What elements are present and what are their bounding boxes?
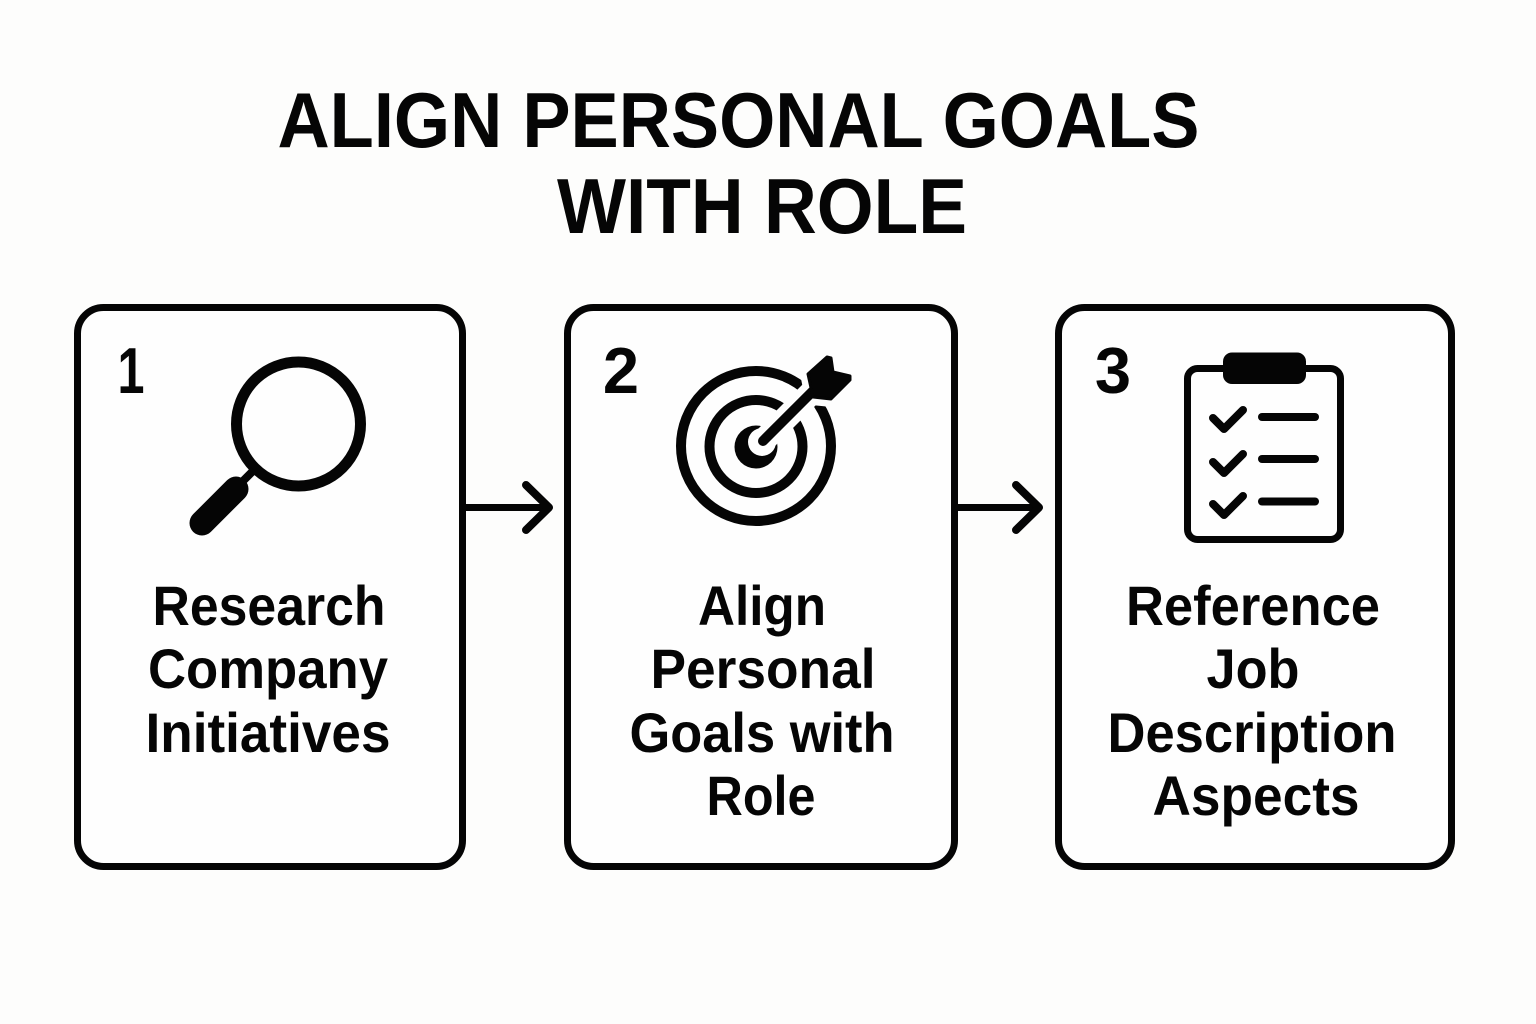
icon: magnifying glass — [202, 362, 360, 523]
arrow: step 2 to 3 — [958, 485, 1039, 530]
step 1 label — [146, 574, 390, 764]
step 2 label: Role — [706, 764, 816, 827]
step 1 label: Initiatives — [146, 701, 390, 764]
step 1 label: Research — [152, 574, 386, 637]
step 3 label: Aspects — [1152, 764, 1360, 827]
step 1 label: Company — [148, 637, 388, 700]
step 2 label: Personal — [650, 637, 876, 700]
step 2 label — [630, 574, 894, 827]
step 3 label — [1108, 574, 1396, 827]
arrow: step 1 to 2 — [466, 485, 549, 530]
icon: target with arrow — [681, 355, 852, 521]
icon: clipboard checklist — [1188, 352, 1340, 540]
panel: step 3 — [1058, 308, 1452, 866]
step 2 label: Goals with — [630, 701, 894, 764]
number 2: 2 — [603, 334, 639, 407]
title: ALIGN PERSONAL GOALS — [278, 76, 1200, 164]
title: WITH ROLE — [557, 162, 967, 250]
number 3: 3 — [1095, 334, 1131, 407]
number 1: 1 — [118, 334, 144, 407]
step 2 label: Align — [698, 574, 826, 637]
step 3 label: Reference — [1126, 574, 1380, 637]
panel: step 1 — [78, 308, 462, 866]
step 3 label: Job — [1206, 637, 1300, 700]
step 3 label: Description — [1108, 701, 1396, 764]
title — [278, 76, 1200, 250]
panel: step 2 — [568, 308, 954, 866]
